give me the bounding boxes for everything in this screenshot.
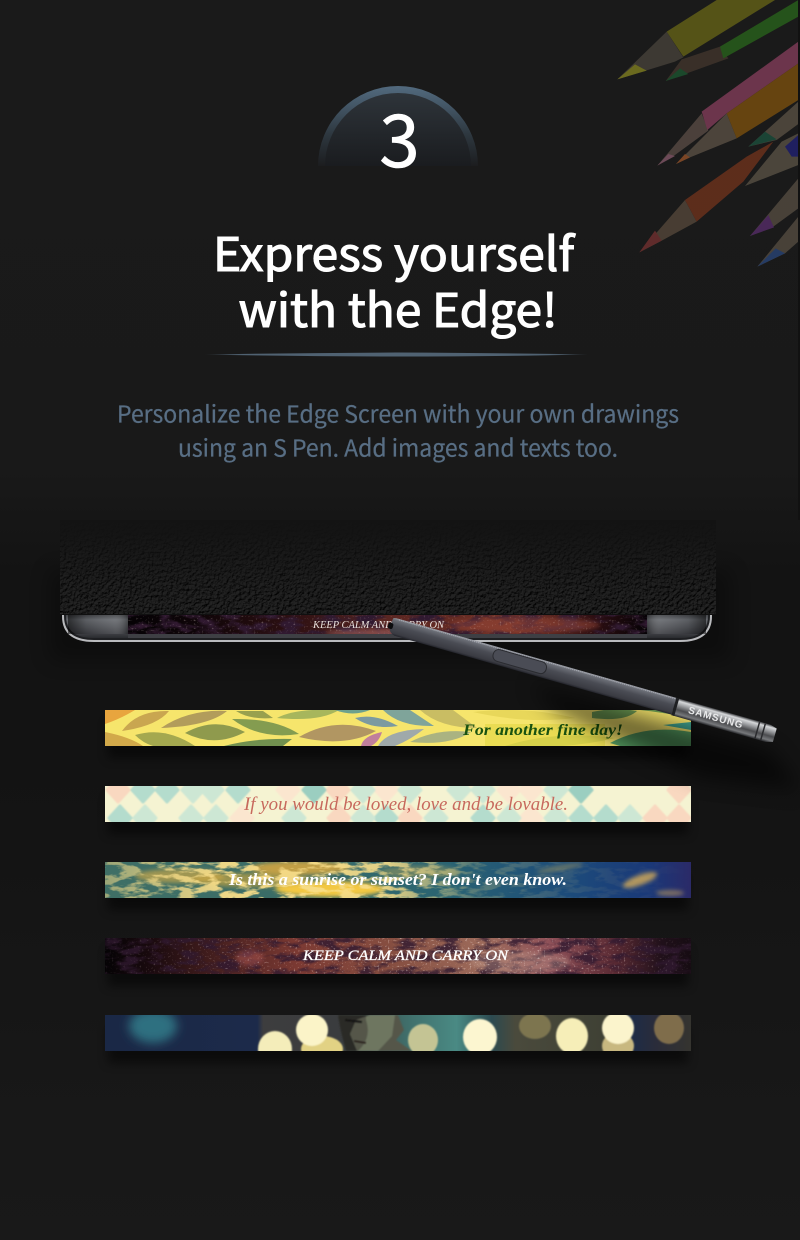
pencil: green: [666, 0, 798, 81]
strip 2 text: If you would be loved, love and be lovable.: [243, 794, 568, 815]
edge strip 3: sky: [105, 861, 691, 898]
subtitle: using an S Pen. Add images and texts too.: [178, 430, 618, 464]
edge strip 5: bokeh portrait: [105, 1015, 691, 1051]
subtitle: [117, 396, 679, 464]
title: [213, 218, 576, 341]
bokeh lights: [257, 1015, 685, 1051]
subtitle: Personalize the Edge Screen with your own drawings: [117, 396, 679, 430]
pencil: red: [639, 142, 773, 252]
leather cover: [60, 520, 716, 615]
edge strip 2: diamonds: [105, 786, 691, 822]
pencil: wood and green tip: [748, 102, 798, 147]
pencil: blue-tipped wood: [745, 133, 798, 186]
strip shadows: [108, 722, 688, 1063]
pen silver end: [671, 698, 777, 744]
edge screen: [128, 615, 647, 634]
strip 1 text: For another fine day!: [462, 722, 623, 739]
pencil: purple: [750, 178, 798, 236]
strip 3 text: Is this a sunrise or sunset? I don't even know.: [228, 870, 567, 889]
screen text: KEEP CALM AND CARRY ON: [312, 620, 445, 631]
badge number: 3: [379, 83, 420, 189]
pencil: orange: [676, 63, 798, 164]
device shadow: [50, 570, 730, 660]
pencil: pink: [657, 42, 798, 166]
title underline: [205, 352, 588, 356]
phone body: [62, 612, 712, 642]
pen button: [492, 648, 548, 675]
strip 4 text: KEEP CALM AND CARRY ON: [302, 948, 509, 964]
edge strip 1: leaves: [105, 709, 691, 747]
pencil: blue: [757, 217, 798, 267]
pen barrel: [386, 616, 676, 715]
pencil: yellow: [617, 0, 775, 79]
title: with the Edge!: [238, 274, 558, 341]
decoration: coloured pencils: [617, 0, 798, 267]
pen brand: SAMSUNG: [687, 705, 744, 731]
number badge: [318, 86, 478, 168]
title: Express yourself: [213, 218, 576, 285]
edge strip 4: galaxy: [105, 938, 691, 974]
S Pen: [386, 616, 777, 744]
pen shadow: [530, 684, 800, 790]
device: phone in leather cover: [60, 558, 716, 642]
portrait figure: [338, 1015, 412, 1051]
